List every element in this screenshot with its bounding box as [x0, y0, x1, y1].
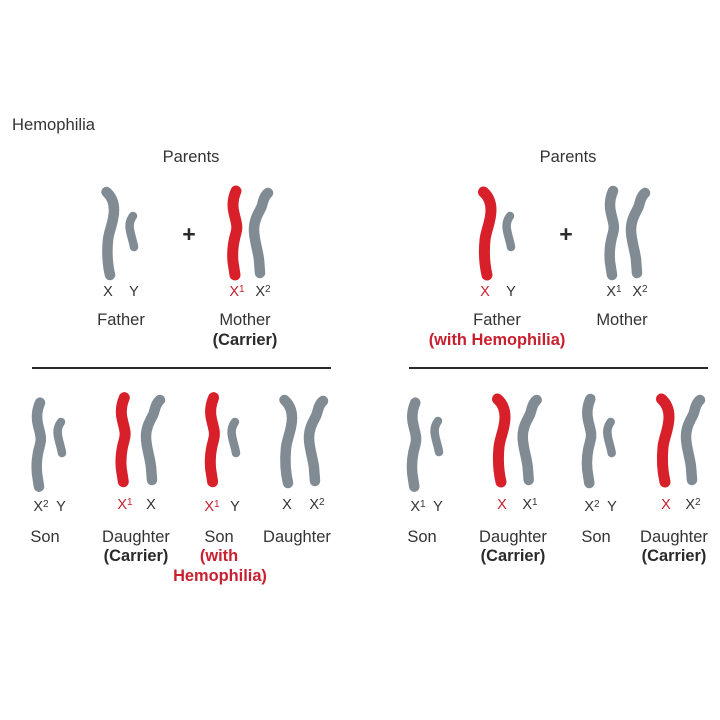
- child: daughter X X2: [263, 400, 331, 546]
- title: Hemophilia: [12, 115, 96, 134]
- label: X1: 1: [616, 284, 622, 295]
- label: X: X: [480, 284, 490, 300]
- divider line: [32, 367, 331, 369]
- chromosome: mother X1: [233, 191, 237, 275]
- chromosome: father Y: [130, 216, 134, 247]
- label: X: X: [103, 284, 113, 300]
- label: mother carrier: Mother: [219, 311, 271, 329]
- child: son X2 Y: 2: [43, 499, 49, 510]
- child: daughter carrier: X: [661, 497, 671, 513]
- child: daughter carrier: X: [117, 497, 127, 513]
- child: daughter carrier: 1: [532, 497, 538, 508]
- label: mother carrier: [213, 311, 277, 349]
- label: X2: 2: [642, 284, 648, 295]
- label: X1: X: [606, 284, 616, 300]
- child: son X1 Y: 1: [420, 499, 426, 510]
- child: son X2 Y: Y: [607, 499, 617, 515]
- child: daughter carrier: X: [497, 497, 507, 513]
- plus sign: +: [559, 221, 573, 247]
- divider line: [409, 367, 708, 369]
- panel: children of carrier mother: [30, 398, 331, 585]
- child: daughter carrier: (Carrier): [642, 547, 706, 565]
- label: X1: X: [229, 284, 239, 300]
- child: son with hemophilia: Hemophilia): [173, 567, 267, 585]
- child: son with hemophilia: (with: [200, 547, 238, 565]
- panel: father with hemophilia: [409, 148, 708, 369]
- label: mother: Mother: [596, 311, 648, 329]
- heading: parents: Parents: [163, 148, 219, 166]
- child: daughter carrier: [479, 399, 547, 565]
- child: son X2 Y: X: [33, 499, 43, 515]
- child: daughter X X2: 2: [319, 497, 325, 508]
- plus sign: +: [182, 221, 196, 247]
- child: daughter carrier: (Carrier): [104, 547, 168, 565]
- label: X2: 2: [265, 284, 271, 295]
- label: father with hemophilia: Father: [473, 311, 521, 329]
- label: mother carrier: (Carrier): [213, 331, 277, 349]
- child: daughter carrier: [102, 398, 170, 565]
- child: son X1 Y: X: [410, 499, 420, 515]
- child: daughter carrier: Daughter: [102, 528, 170, 546]
- chromosome: father X red: [484, 192, 491, 275]
- child: son X1 Y: Son: [407, 528, 437, 546]
- child: daughter X X2: X: [309, 497, 319, 513]
- child: son X2 Y: [30, 403, 66, 546]
- child: daughter carrier: Daughter: [640, 528, 708, 546]
- label: father with hemophilia: (with Hemophilia): [429, 331, 565, 349]
- child: daughter carrier: 1: [127, 497, 133, 508]
- label: father: Father: [97, 311, 145, 329]
- chromosome: father X: [106, 192, 114, 275]
- child: son X2 Y: [581, 399, 617, 546]
- child: son with hemophilia: X: [204, 499, 214, 515]
- chromosome: father Y: [507, 216, 511, 247]
- child: daughter carrier: 2: [695, 497, 701, 508]
- child: daughter carrier: X: [685, 497, 695, 513]
- child: son with hemophilia: 1: [214, 499, 220, 510]
- child: son X2 Y: X: [584, 499, 594, 515]
- child: son with hemophilia: [173, 398, 267, 585]
- child: son with hemophilia: Son: [204, 528, 234, 546]
- label: Y: Y: [506, 284, 516, 300]
- child: daughter X X2: X: [282, 497, 292, 513]
- chromosome: mother X2: [254, 193, 268, 273]
- heading: parents: Parents: [540, 148, 596, 166]
- child: daughter carrier: [640, 399, 708, 565]
- chromosome: mother X2: [631, 193, 645, 273]
- child: son X2 Y: Son: [30, 528, 60, 546]
- child: son with hemophilia: Y: [230, 499, 240, 515]
- child: son X1 Y: [407, 403, 443, 546]
- chromosome: mother X1: [610, 191, 614, 275]
- child: son X1 Y: Y: [433, 499, 443, 515]
- panel: children of father with hemophilia: [407, 399, 708, 565]
- child: daughter carrier: (Carrier): [481, 547, 545, 565]
- label: X2: X: [255, 284, 265, 300]
- child: son X2 Y: Y: [56, 499, 66, 515]
- label: father with hemophilia: [429, 311, 565, 349]
- child: daughter carrier: X: [522, 497, 532, 513]
- child: son X2 Y: Son: [581, 528, 611, 546]
- child: son X2 Y: 2: [594, 499, 600, 510]
- child: daughter carrier: Daughter: [479, 528, 547, 546]
- child: daughter X X2: Daughter: [263, 528, 331, 546]
- label: Y: Y: [129, 284, 139, 300]
- child: daughter carrier: X: [146, 497, 156, 513]
- panel: carrier mother: [32, 148, 331, 369]
- label: X2: X: [632, 284, 642, 300]
- label: X1: 1: [239, 284, 245, 295]
